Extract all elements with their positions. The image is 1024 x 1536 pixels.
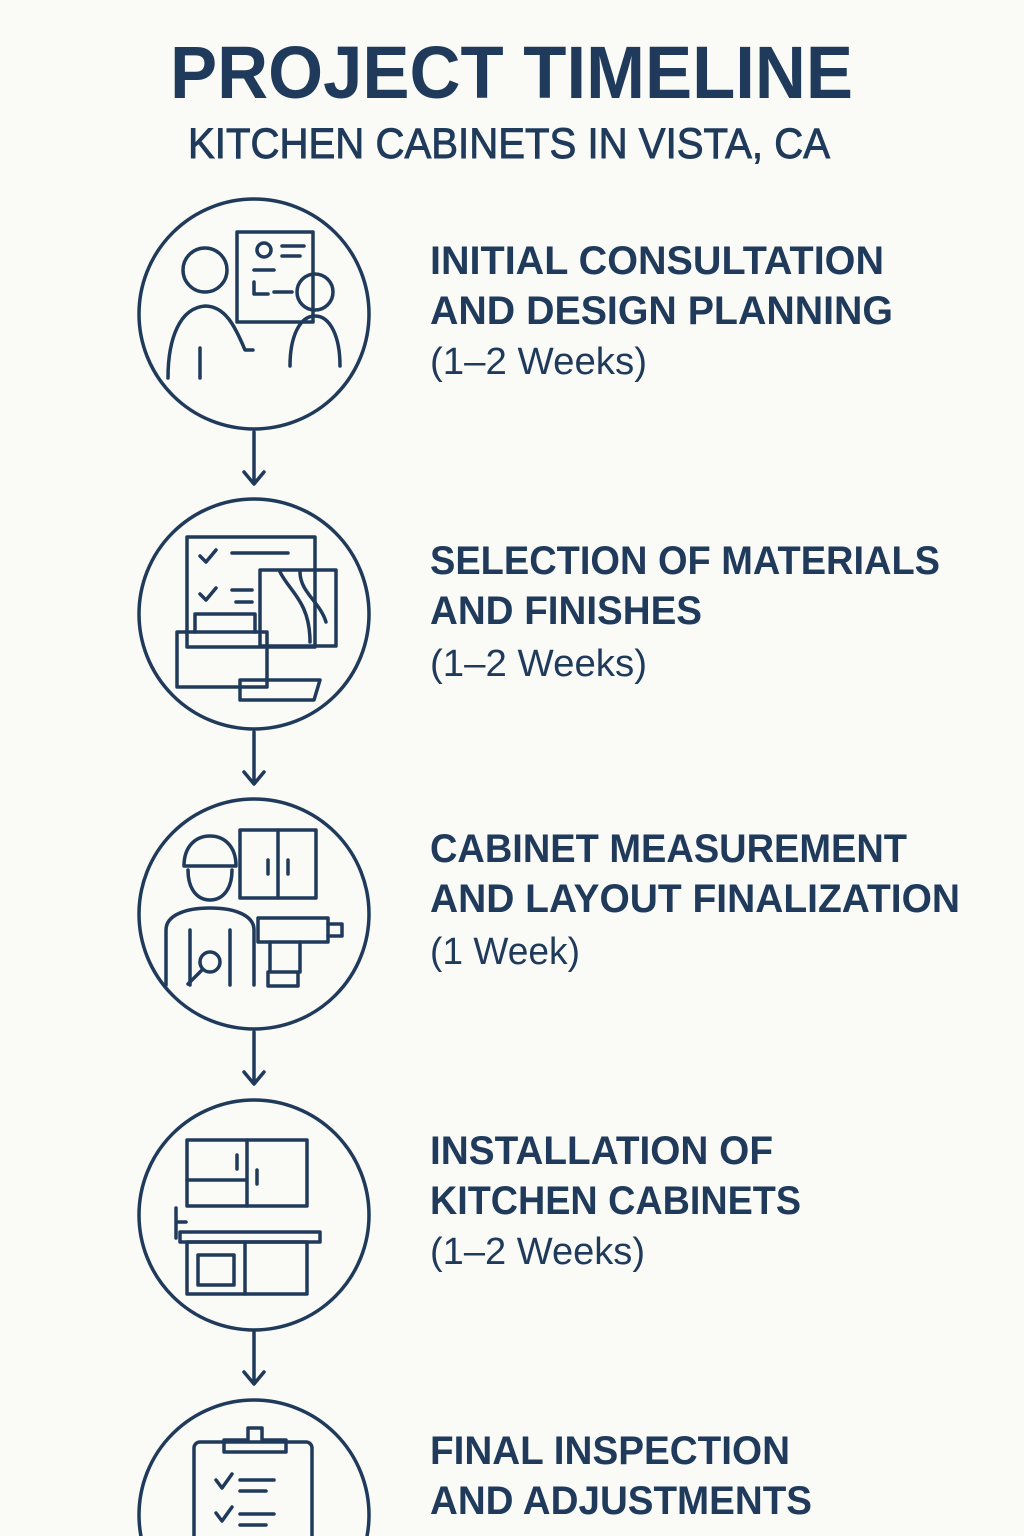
arrow [244,732,264,784]
text: step 3: (1 Week) [430,931,580,973]
text: step 5 [430,1429,812,1523]
text: step 2: AND FINISHES [430,589,702,633]
text: step 3 [430,827,960,973]
title: PROJECT TIMELINE [170,31,853,114]
text: step 1: AND DESIGN PLANNING [430,289,893,333]
icon: measurement worker [139,799,369,1029]
text: step 4: KITCHEN CABINETS [430,1179,801,1223]
arrow [244,1032,264,1084]
step 4 [139,1100,369,1384]
text: step 3: CABINET MEASUREMENT [430,827,907,871]
arrow [244,432,264,484]
text: step 5: FINAL INSPECTION [430,1429,790,1473]
text: step 4: (1–2 Weeks) [430,1231,645,1273]
text: step 2 [430,539,940,685]
step 3 [139,799,369,1084]
icon: clipboard [139,1400,369,1536]
text: step 4 [430,1129,801,1273]
icon: materials [139,499,369,729]
text: step 2: SELECTION OF MATERIALS [430,539,940,583]
text: step 1: INITIAL CONSULTATION [430,239,884,283]
text: step 1: (1–2 Weeks) [430,341,647,383]
subtitle: KITCHEN CABINETS IN VISTA, CA [188,120,830,168]
icon: kitchen cabinets [139,1100,369,1330]
text: step 2: (1–2 Weeks) [430,643,647,685]
step 1 [139,199,369,484]
text: step 4: INSTALLATION OF [430,1129,773,1173]
step 5 [139,1400,369,1536]
arrow [244,1332,264,1384]
text: step 3: AND LAYOUT FINALIZATION [430,877,960,921]
text: step 1 [430,239,893,383]
text: step 5: AND ADJUSTMENTS [430,1479,812,1523]
icon: consultation [139,199,369,429]
step 2 [139,499,369,784]
